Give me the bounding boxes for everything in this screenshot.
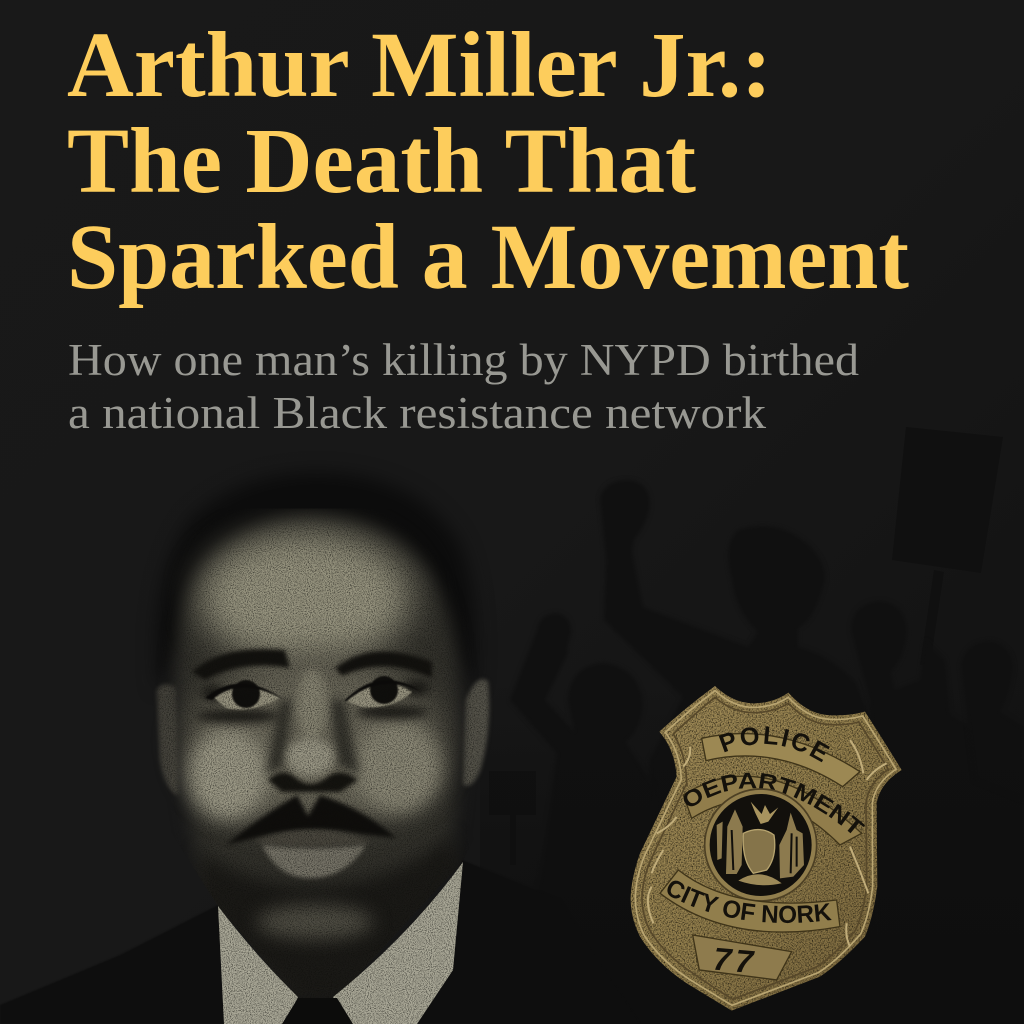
title <box>67 14 909 309</box>
seal base <box>738 874 782 885</box>
subtitle: How one man’s killing by NYPD birthed <box>68 335 859 385</box>
title: Arthur Miller Jr.: <box>67 14 772 117</box>
background protester right <box>851 601 1024 1024</box>
placard sign <box>892 427 1003 665</box>
number 77 plate: 77 <box>712 941 758 980</box>
lips <box>254 831 372 878</box>
forehead highlight <box>200 532 410 664</box>
face base <box>171 515 462 890</box>
collar <box>218 862 463 1024</box>
title: Sparked a Movement <box>67 206 909 309</box>
laurel leaves <box>648 740 887 947</box>
eyebrows <box>192 649 432 680</box>
POLICE banner: POLICE <box>718 726 830 762</box>
seal crest <box>751 802 778 824</box>
small placard <box>489 771 536 865</box>
nose <box>266 669 360 792</box>
subtitle <box>68 335 859 438</box>
CITY OF NORK banner: CITY OF NORK <box>667 880 832 924</box>
right cheek highlight <box>354 722 442 814</box>
badge body <box>631 686 902 1011</box>
left cheek highlight <box>188 729 268 821</box>
portrait of Arthur Miller Jr. <box>0 472 640 1024</box>
right figure <box>779 813 804 878</box>
seal dark details <box>732 830 797 873</box>
mid face tone <box>190 655 440 825</box>
police badge <box>630 686 902 1011</box>
seal shield <box>743 830 775 873</box>
suit <box>0 860 640 1024</box>
eye shadows <box>196 680 430 723</box>
left eye <box>205 680 284 710</box>
POLICE banner <box>701 726 861 788</box>
main protester with raised fist <box>600 480 880 1024</box>
lower right shadow <box>480 680 1024 1024</box>
badge rim <box>635 691 896 1005</box>
left figure <box>717 809 743 874</box>
number 77 plate <box>693 935 792 980</box>
mustache <box>226 795 396 845</box>
right eye <box>344 676 422 707</box>
city seal <box>705 789 817 901</box>
ears <box>157 679 489 795</box>
title: The Death That <box>67 110 696 213</box>
hair <box>156 472 476 690</box>
lower face shadow <box>202 840 452 994</box>
protest crowd silhouettes <box>489 427 1024 1024</box>
subtitle: a national Black resistance network <box>68 388 767 438</box>
DEPARTMENT banner: OEPARTMENT <box>684 772 865 834</box>
chin highlight <box>257 905 373 939</box>
left protester <box>500 613 654 1024</box>
tie <box>282 998 353 1024</box>
background protester far right <box>961 641 1024 800</box>
